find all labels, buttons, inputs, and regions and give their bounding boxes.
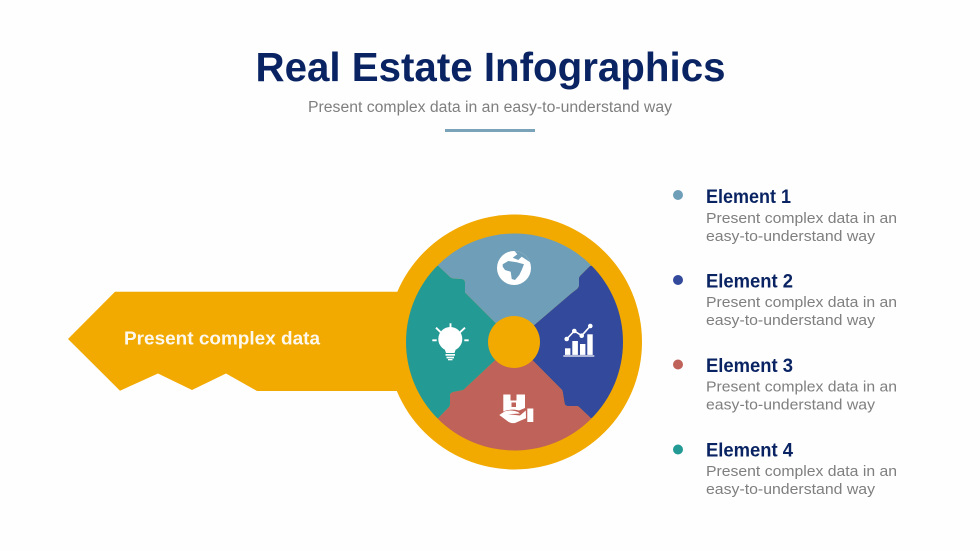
bullet 2 bbox=[673, 275, 683, 285]
segment: left bbox=[406, 266, 496, 418]
bullet 3 bbox=[673, 360, 683, 370]
icon: hand holding building bbox=[499, 394, 533, 423]
heading 3: Element 3 bbox=[706, 356, 793, 377]
body 4: Present complex data in an bbox=[706, 463, 897, 480]
body 1: easy-to-understand way bbox=[706, 228, 876, 245]
title: Real Estate Infographics bbox=[256, 44, 726, 90]
legend: element 2 bbox=[673, 272, 897, 329]
key head hub bbox=[488, 316, 540, 368]
legend: element 1 bbox=[673, 187, 897, 245]
body 2: easy-to-understand way bbox=[706, 312, 876, 329]
heading 4: Element 4 bbox=[706, 440, 793, 462]
subtitle: Present complex data in an easy-to-understand way bbox=[308, 99, 672, 116]
key blade bbox=[68, 292, 410, 391]
icon: growth chart bbox=[563, 324, 594, 357]
key blade label: Present complex data bbox=[124, 328, 321, 348]
segment: bottom bbox=[438, 360, 592, 450]
segment: right bbox=[532, 266, 623, 418]
title divider bbox=[445, 129, 535, 132]
body 3: Present complex data in an bbox=[706, 378, 897, 396]
key graphic bbox=[68, 214, 642, 470]
body 3: easy-to-understand way bbox=[706, 396, 876, 414]
body 4: easy-to-understand way bbox=[706, 481, 876, 498]
bullet 1 bbox=[673, 190, 683, 200]
body 2: Present complex data in an bbox=[706, 294, 897, 311]
icon: light bulb bbox=[432, 323, 469, 360]
icon: globe bbox=[497, 250, 532, 285]
heading 2: Element 2 bbox=[706, 272, 793, 292]
puzzle wheel bbox=[406, 234, 623, 450]
legend: element 4 bbox=[673, 440, 897, 498]
bullet 4 bbox=[673, 444, 683, 454]
key head ring bbox=[387, 214, 642, 470]
body 1: Present complex data in an bbox=[706, 210, 897, 227]
legend: element 3 bbox=[673, 356, 897, 414]
segment: top bbox=[438, 234, 591, 326]
heading 1: Element 1 bbox=[706, 187, 791, 208]
